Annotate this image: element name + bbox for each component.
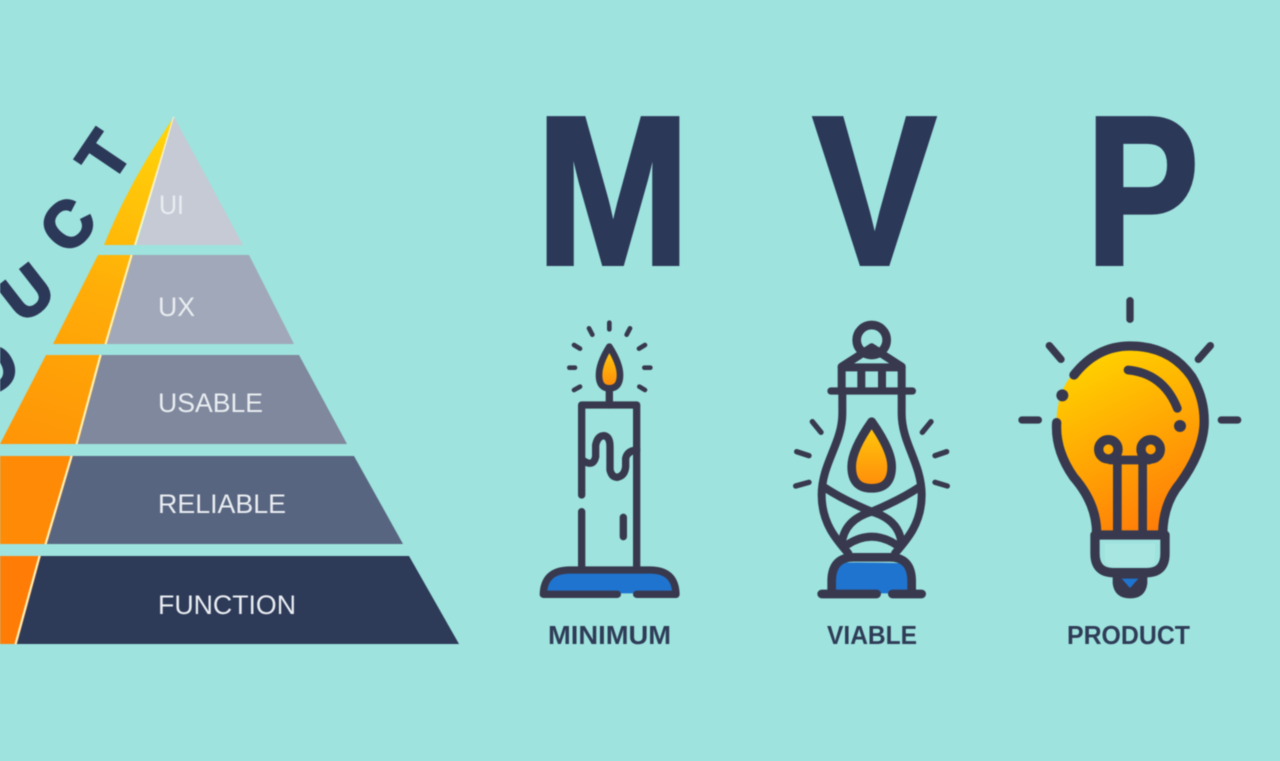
icon: candle bbox=[543, 323, 676, 594]
caption: MINIMUM: MINIMUM bbox=[548, 620, 671, 650]
icon: light bulb bbox=[1022, 301, 1238, 596]
tier: UX: UX bbox=[158, 292, 195, 322]
curved word: PRODUCT: T bbox=[63, 119, 145, 192]
pyramid bbox=[0, 117, 459, 644]
tier: FUNCTION: FUNCTION bbox=[158, 590, 296, 620]
curved word: PRODUCT bbox=[0, 119, 145, 412]
tier: UI bbox=[104, 117, 243, 245]
tier: USABLE bbox=[0, 355, 347, 444]
tier: RELIABLE: RELIABLE bbox=[158, 489, 286, 519]
tier: UI: UI bbox=[159, 190, 184, 220]
icon: lantern bbox=[796, 325, 947, 594]
heading letter: P: P bbox=[1086, 72, 1199, 309]
caption: VIABLE: VIABLE bbox=[827, 620, 917, 650]
tier: FUNCTION bbox=[0, 556, 459, 644]
tier: RELIABLE bbox=[0, 456, 403, 544]
heading letter: M: M bbox=[536, 72, 690, 309]
caption: PRODUCT: PRODUCT bbox=[1067, 620, 1190, 650]
curved word: PRODUCT: C bbox=[26, 183, 110, 266]
heading letter: V: V bbox=[813, 72, 936, 309]
tier: USABLE: USABLE bbox=[158, 388, 263, 418]
tier: UX bbox=[53, 255, 294, 344]
